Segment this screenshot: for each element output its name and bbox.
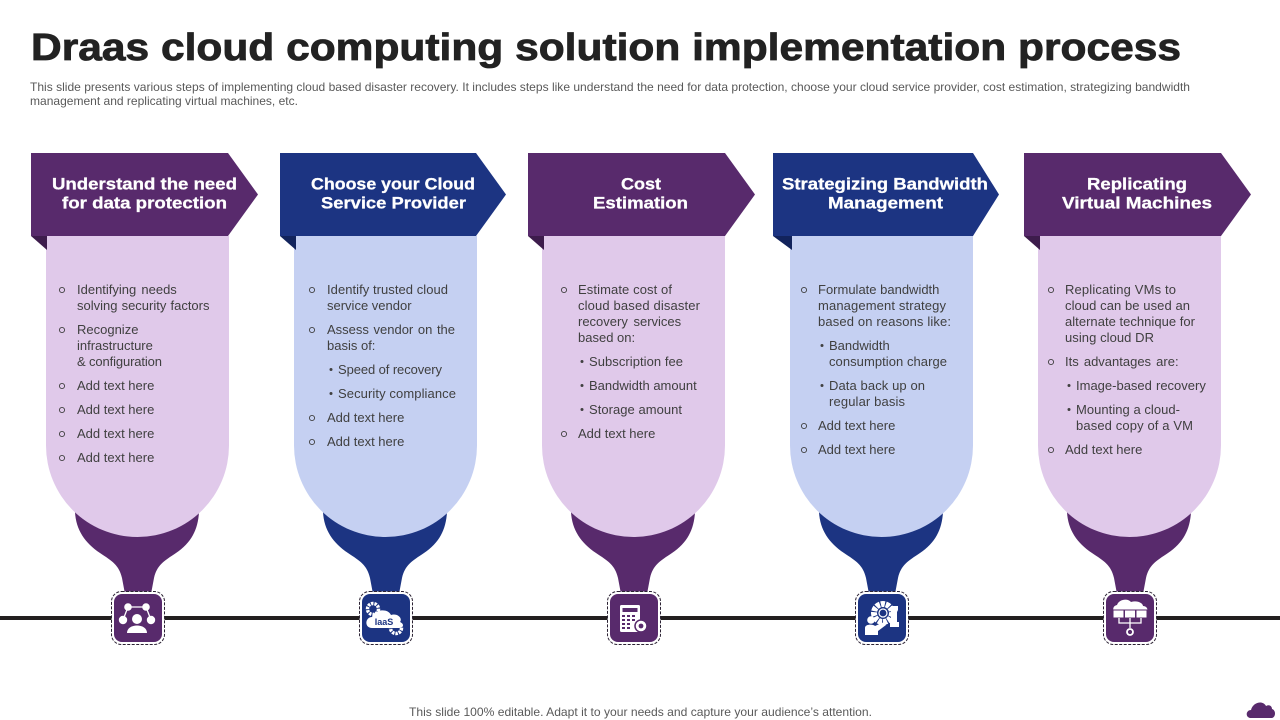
list: Replicating VMs to <box>1065 282 1176 297</box>
header text: Management <box>828 194 943 212</box>
list: Identify trusted cloud <box>327 282 448 297</box>
list: using cloud DR <box>1065 330 1154 345</box>
list: Add text here <box>818 442 895 457</box>
list: recovery services <box>578 314 682 329</box>
header text: Replicating <box>1087 174 1187 194</box>
icon: brand cloud <box>1247 703 1275 718</box>
header fold <box>1024 236 1040 250</box>
funnel stem <box>1067 512 1191 594</box>
description text <box>30 80 1190 108</box>
funnel stem <box>571 512 695 594</box>
icon: person with gear and chess piece <box>856 592 908 644</box>
header text: Strategizing Bandwidth <box>782 174 988 194</box>
list: Add text here <box>77 402 154 417</box>
list: Mounting a cloud- <box>1076 402 1180 417</box>
list: Data back up on <box>829 378 925 393</box>
panel: replicating virtual machines <box>1024 153 1251 644</box>
header text <box>782 174 988 212</box>
list <box>309 282 456 449</box>
header arrow <box>528 153 755 236</box>
header fold <box>31 236 47 250</box>
list: based on: <box>578 330 635 345</box>
list: Subscription fee <box>589 354 683 369</box>
icon: calculator with coin <box>608 592 660 644</box>
header text: Virtual Machines <box>1062 194 1212 212</box>
title: Draas cloud computing solution implementation process <box>31 27 1181 69</box>
list: based on reasons like: <box>818 314 951 329</box>
funnel stem <box>819 512 943 594</box>
list: solving security factors <box>77 298 210 313</box>
footer note: This slide 100% editable. Adapt it to your needs and capture your audience’s attention. <box>409 705 872 719</box>
list: infrastructure <box>77 338 153 353</box>
list: Add text here <box>77 378 154 393</box>
panel: choose your cloud service provider <box>280 153 506 644</box>
list: Estimate cost of <box>578 282 672 297</box>
panel: cost estimation <box>528 153 755 644</box>
header text <box>52 174 237 212</box>
body capsule <box>1038 236 1221 537</box>
list <box>59 282 210 465</box>
icon: people network <box>112 592 164 644</box>
list: Add text here <box>77 450 154 465</box>
body capsule <box>790 236 973 537</box>
header text: Estimation <box>593 194 688 212</box>
list: Formulate bandwidth <box>818 282 939 297</box>
header arrow <box>31 153 258 236</box>
header text: Cost <box>621 174 661 194</box>
body capsule <box>46 236 229 537</box>
header text <box>593 174 688 212</box>
list <box>1048 282 1206 457</box>
list: service vendor <box>327 298 412 313</box>
list: cloud can be used an <box>1065 298 1190 313</box>
list: consumption charge <box>829 354 947 369</box>
timeline line <box>0 616 1280 620</box>
panel: strategizing bandwidth management <box>773 153 999 644</box>
body capsule <box>542 236 725 537</box>
list: Bandwidth amount <box>589 378 697 393</box>
list: Its advantages are: <box>1065 354 1179 369</box>
header arrow <box>280 153 506 236</box>
header text: Choose your Cloud <box>311 174 475 194</box>
list: Security compliance <box>338 386 456 401</box>
list: Speed of recovery <box>338 362 442 377</box>
list: Storage amount <box>589 402 682 417</box>
funnel stem <box>323 512 447 594</box>
list: alternate technique for <box>1065 314 1196 329</box>
list <box>801 282 951 457</box>
header fold <box>528 236 544 250</box>
list: Bandwidth <box>829 338 890 353</box>
list: Add text here <box>1065 442 1142 457</box>
list: Add text here <box>578 426 655 441</box>
list: basis of: <box>327 338 375 353</box>
list: based copy of a VM <box>1076 418 1193 433</box>
list <box>561 282 701 441</box>
list: Image-based recovery <box>1076 378 1206 393</box>
list: regular basis <box>829 394 906 409</box>
list: management strategy <box>818 298 946 313</box>
header fold <box>773 236 792 250</box>
icon: cloud with servers <box>1104 592 1156 644</box>
list: Add text here <box>327 410 404 425</box>
header fold <box>280 236 296 250</box>
description text: This slide presents various steps of implementing cloud based disaster recovery. It includes steps like understand the need for data protection, choose your cloud service provider, cost estimation, strategizing bandwidth <box>30 80 1190 94</box>
icon: IaaS cloud with gears: IaaS <box>375 617 393 627</box>
panel: understand the need for data protection <box>31 153 258 644</box>
header text <box>311 174 475 212</box>
funnel stem <box>75 512 199 594</box>
body capsule <box>294 236 477 537</box>
list: Add text here <box>818 418 895 433</box>
header text: Service Provider <box>321 194 466 212</box>
list: Recognize <box>77 322 138 337</box>
list: cloud based disaster <box>578 298 701 313</box>
list: Assess vendor on the <box>327 322 455 337</box>
header arrow <box>1024 153 1251 236</box>
list: Identifying needs <box>77 282 177 297</box>
header text <box>1062 174 1212 212</box>
header text: for data protection <box>62 194 227 212</box>
header text: Understand the need <box>52 174 237 194</box>
list: & configuration <box>77 354 162 369</box>
description text: management and replicating virtual machines, etc. <box>30 94 298 108</box>
header arrow <box>773 153 999 236</box>
icon: IaaS cloud with gears <box>360 592 412 644</box>
list: Add text here <box>327 434 404 449</box>
list: Add text here <box>77 426 154 441</box>
